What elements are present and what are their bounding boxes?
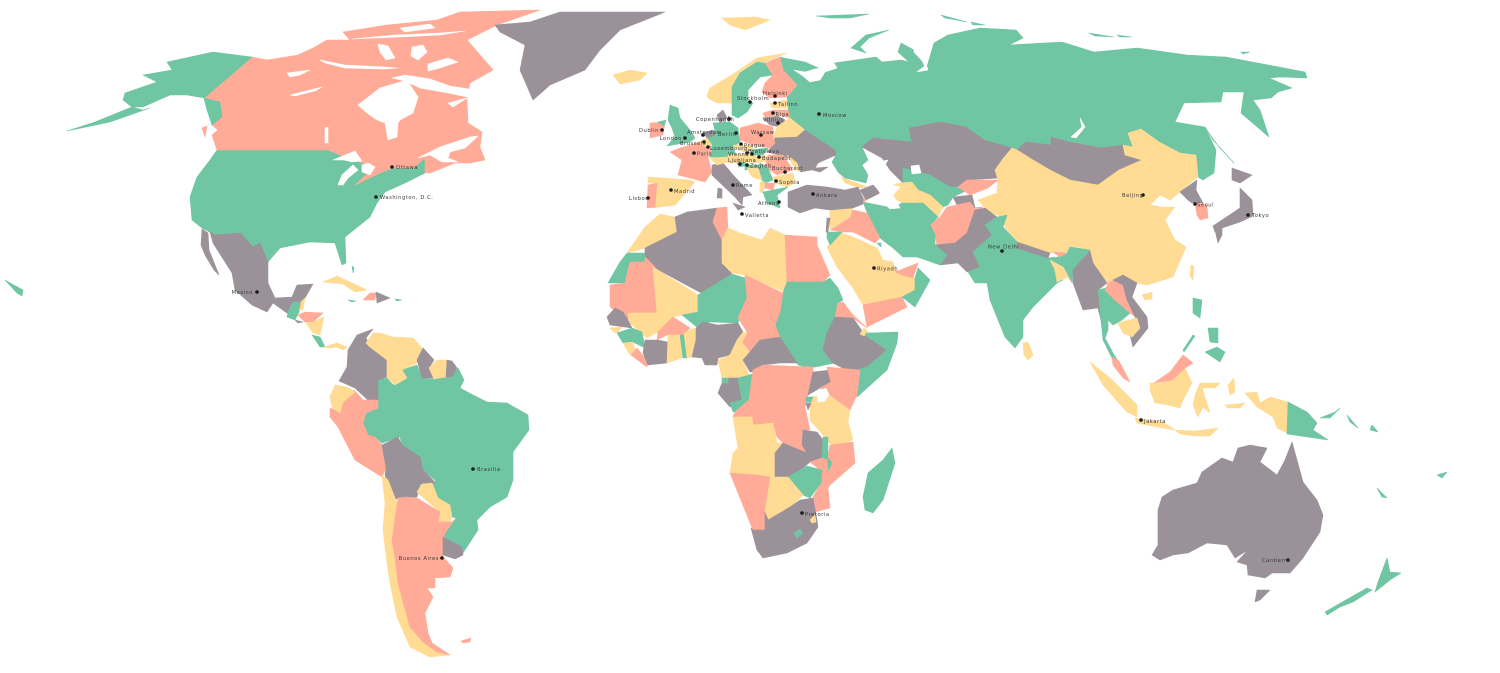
capital: Buenos Aires: Buenos Aires bbox=[399, 556, 439, 562]
capital: Ljubljana: Ljubljana bbox=[728, 158, 756, 164]
capital: Copenhagen: Copenhagen bbox=[696, 117, 734, 123]
capital: Riyadh: Riyadh bbox=[877, 266, 898, 272]
capital: Zagreb: Zagreb bbox=[750, 164, 772, 170]
region: South America bbox=[330, 329, 529, 657]
region: Asia bbox=[780, 14, 1307, 362]
capital: Jakarta: Jakarta bbox=[1143, 419, 1166, 425]
capital: Ankara: Ankara bbox=[816, 193, 838, 199]
capital: Bucharest: Bucharest bbox=[772, 166, 803, 172]
capital: Berlin: Berlin bbox=[718, 132, 736, 138]
capital: London: London bbox=[660, 136, 682, 142]
capital: Budapest: Budapest bbox=[762, 156, 791, 162]
capital: Washington, D.C.: Washington, D.C. bbox=[380, 195, 434, 201]
capital: Vienna: Vienna bbox=[728, 152, 749, 158]
capital: Amsterdam: Amsterdam bbox=[687, 130, 722, 136]
capital: Canberra: Canberra bbox=[1262, 558, 1290, 564]
capital: Vilnius: Vilnius bbox=[763, 118, 784, 124]
capital: Tallinn: Tallinn bbox=[777, 102, 798, 108]
capital: Paris: Paris bbox=[697, 152, 712, 158]
country: Greenland bbox=[495, 12, 665, 100]
capital: Seoul: Seoul bbox=[1197, 202, 1214, 208]
capital: Dublin: Dublin bbox=[639, 128, 659, 134]
capital cities bbox=[232, 91, 1290, 564]
capital: Moscow: Moscow bbox=[823, 113, 847, 119]
capital: Bratislava: Bratislava bbox=[748, 149, 779, 155]
region: Indonesia and Oceania bbox=[1090, 355, 1447, 615]
region: Europe bbox=[613, 17, 836, 210]
capital: Sophia: Sophia bbox=[779, 180, 800, 186]
region: Africa bbox=[607, 207, 898, 558]
capital: Brasilia: Brasilia bbox=[477, 467, 500, 473]
capital: Tokyo: Tokyo bbox=[1251, 213, 1269, 219]
capital: Rome: Rome bbox=[736, 183, 753, 189]
capital: Prague: Prague bbox=[744, 143, 765, 149]
capital: Ottawa: Ottawa bbox=[396, 165, 418, 171]
capital: Brussels: Brussels bbox=[680, 141, 706, 147]
capital: Mexico: Mexico bbox=[232, 290, 253, 296]
capital: Beijing: Beijing bbox=[1122, 193, 1144, 199]
capital: Pretoria: Pretoria bbox=[805, 512, 830, 518]
capital: Riga: Riga bbox=[776, 112, 789, 118]
capital: Stockholm: Stockholm bbox=[737, 96, 769, 102]
capital: Warsaw: Warsaw bbox=[751, 130, 775, 136]
capital: New Delhi: New Delhi bbox=[988, 244, 1019, 250]
capital: Helsinki: Helsinki bbox=[763, 91, 788, 97]
capital: Athens: Athens bbox=[758, 201, 779, 207]
capital: Luxembourg: Luxembourg bbox=[710, 146, 748, 152]
capital: Madrid: Madrid bbox=[674, 189, 695, 195]
capital: Valletta: Valletta bbox=[745, 213, 769, 219]
region: North America bbox=[5, 10, 540, 350]
capital: Riga bbox=[771, 111, 789, 118]
capital: Lisbon: Lisbon bbox=[629, 196, 649, 202]
